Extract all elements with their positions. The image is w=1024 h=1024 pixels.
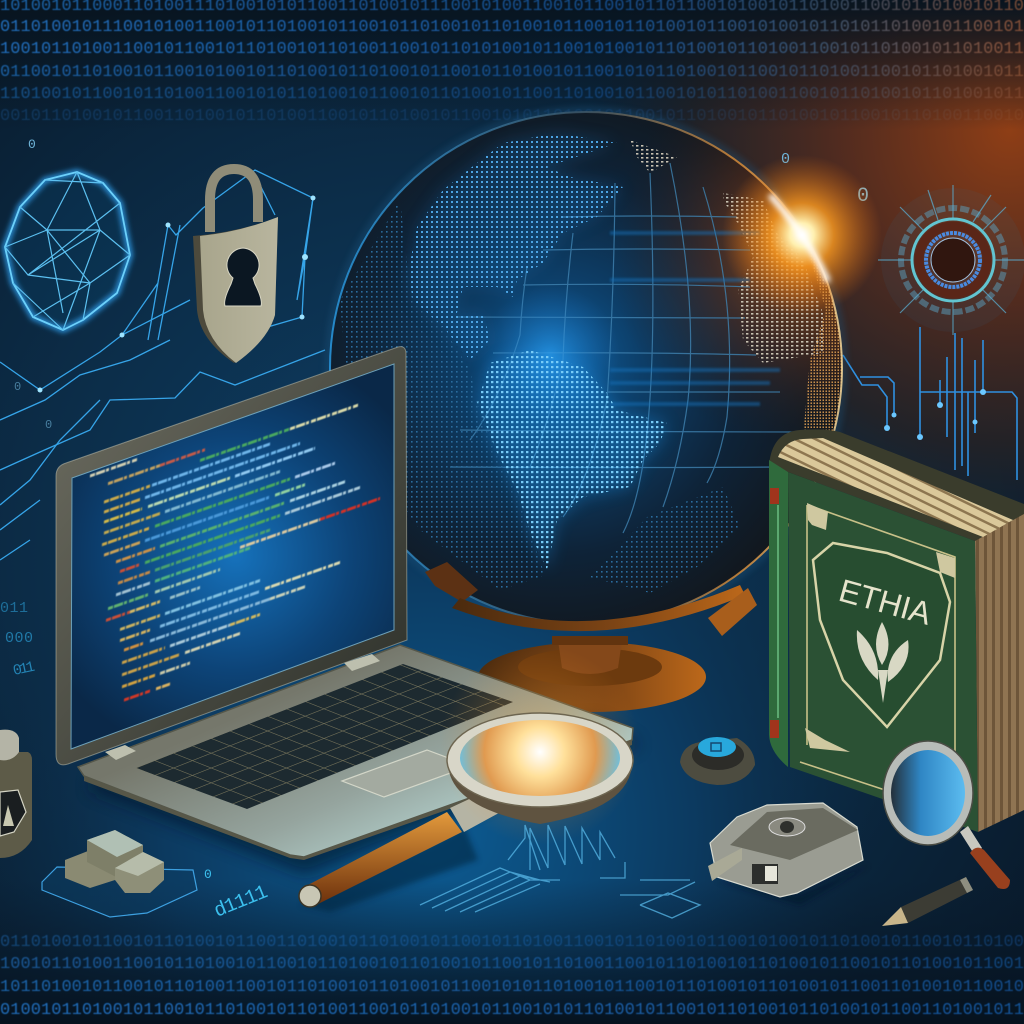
left canister xyxy=(0,730,32,858)
floating digits: d1111 xyxy=(211,881,272,923)
icon: small device xyxy=(680,737,755,785)
laptop xyxy=(56,347,640,875)
binary code band: bottom: 0100101101001011001011010010110100110010110100101100101011010010110010110100101101001011001101001011 xyxy=(0,1001,1024,1020)
binary code band: top: 0110100101110010100110010110100101100101101001011010010110010110100101100101001011010110100101100101 xyxy=(0,18,1024,37)
circuit traces on floor xyxy=(420,825,700,918)
floating digits: 000 xyxy=(5,630,33,647)
lone digits xyxy=(14,137,869,432)
book cover xyxy=(788,472,978,832)
lone digits: 0 xyxy=(28,137,36,152)
book top xyxy=(769,429,1024,541)
binary code band: bottom: 1001011010011001011010010110010110100101101001011001011010011001011010010110100101100101101001011001 xyxy=(0,955,1024,974)
warm side of globe xyxy=(641,137,841,414)
lone digits: 0 xyxy=(14,380,21,394)
continent: east xyxy=(723,193,823,363)
floating digits: 011 xyxy=(0,600,28,617)
lone digits: 0 xyxy=(45,418,52,432)
sun flare xyxy=(722,155,905,315)
grid lines xyxy=(450,163,810,533)
floating digits: 0 xyxy=(204,867,212,882)
limb dots right xyxy=(804,262,842,431)
frame ornaments xyxy=(805,503,955,752)
book xyxy=(769,429,1024,832)
laptop lid xyxy=(56,347,407,765)
continent: lower right xyxy=(590,487,740,593)
light streaks xyxy=(610,233,780,404)
icon: padlock shield xyxy=(193,169,278,363)
screen xyxy=(71,364,394,749)
lone digits: 0 xyxy=(857,185,869,208)
book title: ETHIA xyxy=(835,572,936,632)
continent: north america xyxy=(408,133,623,360)
binary code band: top: 0010110100101100110100101101001100101101001011001010110100101100101101001011010010110010110100110010 xyxy=(0,107,1024,126)
binary code band: top: 1001011010011001011001011010010110100110010110101001011001010010110100101101001100101101001011010011 xyxy=(0,40,1024,59)
continent: limb dots xyxy=(340,200,545,590)
laptop base xyxy=(78,645,633,857)
binary code band: bottom: 0110100101100101101001011001101001011010010110010110100110010110100101100101001011010010110010110100 xyxy=(0,933,1024,952)
isometric blocks on pad xyxy=(42,830,197,917)
hinges xyxy=(105,745,136,760)
trackpad xyxy=(342,750,470,797)
continent: arctic xyxy=(631,141,677,171)
cover frame xyxy=(800,505,955,790)
binary code band: bottom: 1011010010110010110100110010110100101101001011001010110100101100101101001011010010110011010010110010 xyxy=(0,978,1024,997)
shield emblem xyxy=(813,543,950,727)
pencil xyxy=(882,877,973,926)
binary code band: top: 1101001011001011010011001010110100101100101101001011001101001011001010110100110010110100101101001011 xyxy=(0,85,1024,104)
lone digits: 0 xyxy=(781,151,790,168)
continent: south america xyxy=(477,350,667,570)
keyhole xyxy=(225,248,261,306)
leaf emblem xyxy=(857,622,909,703)
keyboard xyxy=(136,664,513,809)
code lines xyxy=(90,374,380,712)
floating digits xyxy=(0,600,272,923)
binary code band: top xyxy=(0,0,1024,126)
globe rim xyxy=(330,112,842,624)
globe xyxy=(324,100,905,630)
circuit lines right xyxy=(843,327,1017,480)
magnifying glass: small xyxy=(883,741,1010,889)
icon: usb security device xyxy=(708,803,870,905)
book pages side xyxy=(975,512,1024,832)
binary code band: top: 0110010110100101100101001011010010110100101100101101001011001010110100101100101101001100101101001011 xyxy=(0,63,1024,82)
icon: wireframe polyhedron xyxy=(5,172,130,330)
continent glows xyxy=(477,350,667,570)
magnifying glass: large xyxy=(299,645,640,912)
globe stand xyxy=(425,562,757,712)
binary code band: bottom xyxy=(0,933,1024,1020)
book spine xyxy=(769,460,788,767)
network lines left xyxy=(0,170,325,560)
icon: circular tech target xyxy=(878,185,1024,335)
floating digits: 011 xyxy=(12,659,37,680)
